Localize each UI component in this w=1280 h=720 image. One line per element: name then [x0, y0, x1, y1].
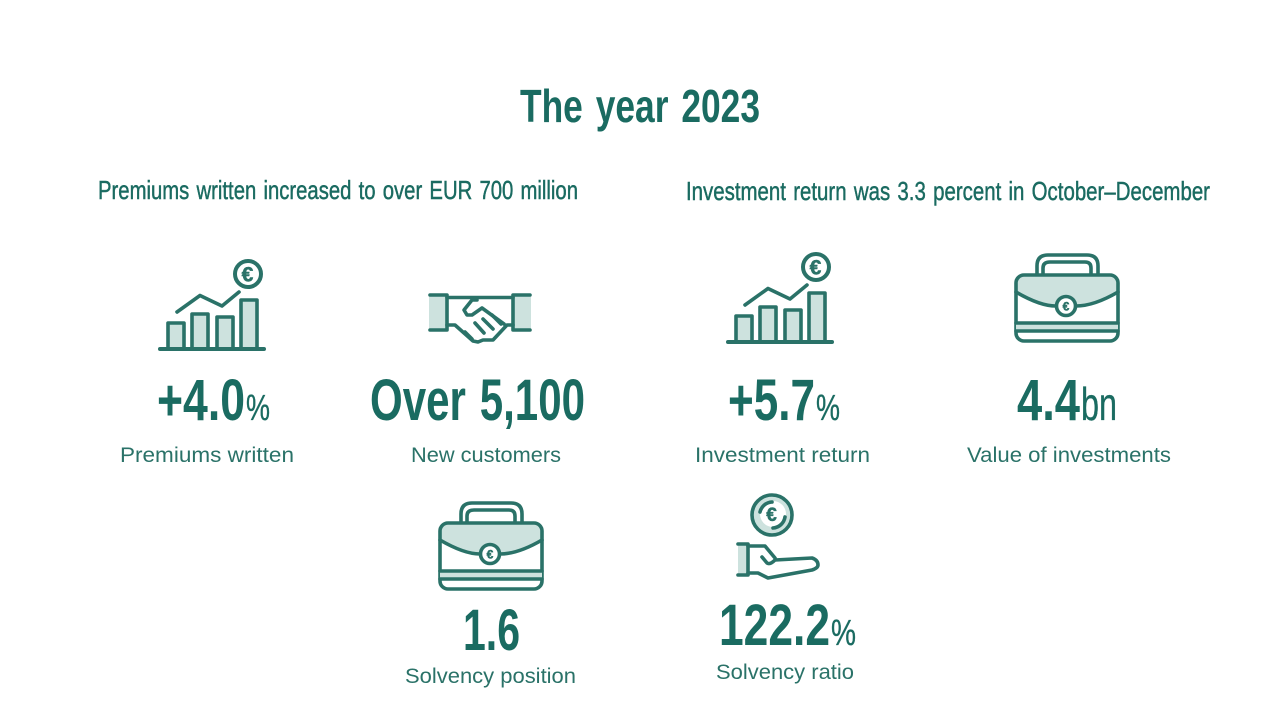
icon: hand with coin	[738, 495, 818, 578]
stat: value of investments: 4.4	[1017, 368, 1080, 433]
icon: premiums bar chart	[160, 261, 264, 349]
icon: solvency briefcase	[440, 503, 542, 589]
stat: new customers: New customers	[411, 444, 561, 467]
stat: new customers: Over 5,100	[370, 368, 585, 433]
stat: solvency position: Solvency position	[405, 665, 576, 688]
stat: solvency ratio: Solvency ratio	[716, 661, 854, 684]
stat: premiums written: Premiums written	[120, 444, 294, 467]
icon: handshake	[429, 295, 531, 342]
stat: investment return: %	[816, 387, 840, 428]
stat: premiums written	[120, 368, 294, 467]
icon: briefcase	[1016, 255, 1118, 341]
heading: premiums: Premiums written increased to over EUR 700 million	[98, 175, 578, 205]
icon: hand with coin: €	[766, 505, 777, 526]
stat: solvency position: 1.6	[463, 598, 520, 663]
stat: solvency position	[405, 598, 576, 688]
stat: solvency ratio: %	[831, 612, 856, 653]
icon: investment bar chart: €	[810, 256, 822, 280]
stat: investment return: +5.7	[728, 368, 815, 433]
stat: premiums written: +4.0	[157, 368, 245, 433]
stat: solvency ratio: 122.2	[719, 593, 830, 658]
stat: investment return	[695, 368, 870, 467]
title: The year 2023	[520, 80, 760, 132]
icon: briefcase: €	[1063, 300, 1070, 314]
icon: solvency briefcase: €	[487, 548, 494, 562]
stat: value of investments: bn	[1081, 378, 1117, 430]
stat: premiums written: %	[246, 387, 270, 428]
stat: value of investments	[967, 368, 1171, 467]
stat: investment return: Investment return	[695, 444, 870, 467]
stat: value of investments: Value of investments	[967, 444, 1171, 467]
stat: new customers	[370, 368, 585, 467]
icon: premiums bar chart: €	[242, 264, 254, 286]
icon: investment bar chart	[728, 254, 832, 342]
stat: solvency ratio	[716, 593, 856, 684]
